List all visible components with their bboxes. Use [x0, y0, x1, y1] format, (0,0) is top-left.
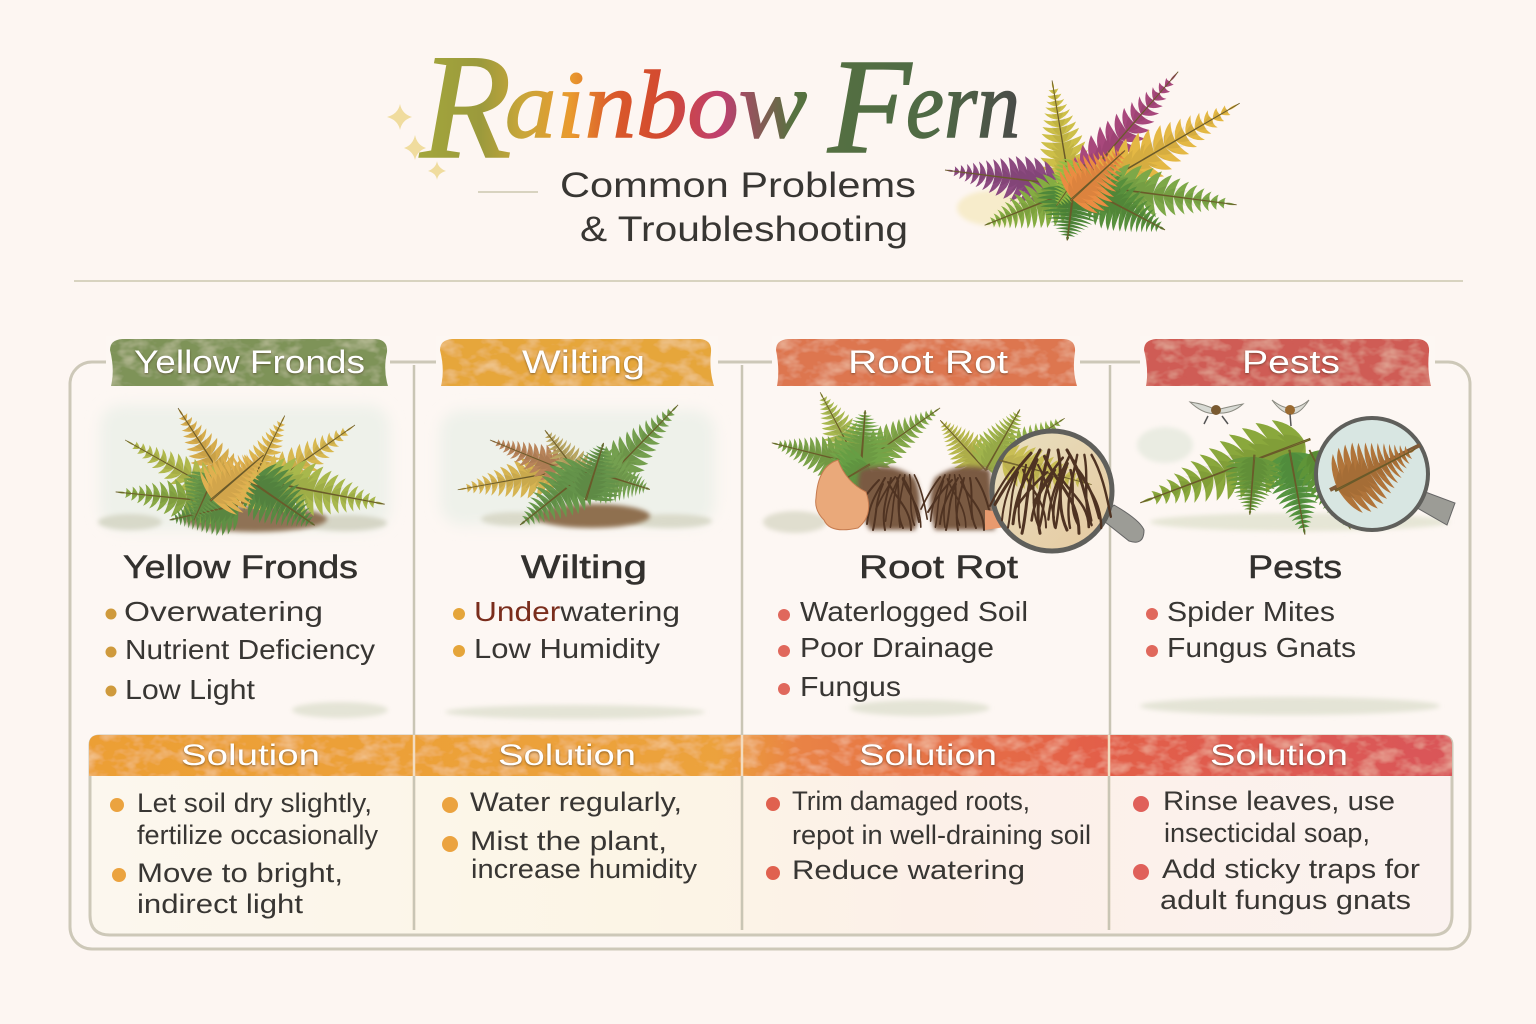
- solution: pests: [1133, 786, 1420, 915]
- heading: root rot: Root Rot: [859, 549, 1018, 585]
- list: causes: Poor Drainage: [800, 632, 994, 663]
- solution: wilting: Mist the plant,: [470, 826, 667, 856]
- list: causes: Spider Mites: [1167, 596, 1335, 627]
- icon: gnats: [1190, 400, 1309, 426]
- list: causes: Low Humidity: [474, 633, 660, 664]
- list: causes: Waterlogged Soil: [800, 596, 1028, 627]
- solution: root rot: repot in well-draining soil: [792, 820, 1091, 850]
- list: causes: Overwatering: [124, 596, 323, 627]
- solution: yellow fronds: fertilize occasionally: [137, 820, 378, 850]
- solution: wilting: increase humidity: [471, 854, 698, 884]
- list: causes: Nutrient Deficiency: [125, 634, 375, 665]
- list: causes: [778, 596, 1028, 702]
- subtitle: Common Problems: [560, 166, 916, 205]
- tab: yellow fronds: [106, 336, 390, 387]
- solution: root rot: Reduce watering: [792, 855, 1025, 885]
- panel: solutions: [89, 735, 1452, 935]
- solution: wilting: [442, 787, 698, 884]
- list: causes: Under watering: [474, 596, 680, 627]
- outer frame: [70, 362, 1470, 949]
- subtitle: [560, 166, 916, 249]
- title: F: [827, 32, 913, 182]
- illustration: pests fern with magnifier: [1128, 400, 1455, 540]
- solutions background: [90, 736, 1452, 935]
- list: causes: [1146, 596, 1356, 663]
- tab: pests: Pests: [1242, 344, 1340, 380]
- illustration: rainbow fern bouquet: [942, 56, 1253, 255]
- solution headings: Solution: [859, 739, 997, 772]
- list: causes: [453, 596, 680, 664]
- divider line: [74, 280, 1463, 282]
- subtitle: & Troubleshooting: [580, 210, 908, 249]
- solution: yellow fronds: indirect light: [137, 889, 304, 919]
- illustration: wilting fern: [440, 389, 715, 548]
- panel: wilting: [436, 336, 718, 664]
- solution: yellow fronds: Let soil dry slightly,: [137, 788, 372, 818]
- illustration: yellowing fern: [98, 395, 390, 551]
- solution: wilting: Water regularly,: [470, 787, 682, 817]
- panel: yellow fronds: [98, 336, 390, 705]
- illustration: root rot fern with magnifier: [763, 382, 1144, 551]
- tab: pests: [1140, 336, 1435, 387]
- title: ern: [906, 51, 1020, 158]
- heading: pests: Pests: [1248, 549, 1342, 585]
- solution: root rot: Trim damaged roots,: [792, 786, 1030, 816]
- list: causes: Low Light: [125, 674, 255, 705]
- solution headings: Solution: [181, 739, 320, 772]
- title: R: [419, 24, 512, 190]
- solution: pests: insecticidal soap,: [1164, 818, 1370, 848]
- tab: root rot: Root Rot: [848, 344, 1008, 380]
- panel: root rot: [763, 336, 1144, 702]
- solution: pests: Add sticky traps for: [1162, 854, 1420, 884]
- solutions header bar: [89, 735, 1452, 776]
- list: causes: Fungus: [800, 671, 901, 702]
- solution: root rot: [766, 786, 1091, 885]
- title: ainbow: [505, 51, 807, 158]
- solution headings: Solution: [1210, 739, 1348, 772]
- solution: pests: Rinse leaves, use: [1163, 786, 1395, 816]
- icon: sparkles: [387, 104, 446, 180]
- watercolor washes above solutions: [292, 697, 1440, 719]
- list: causes: [106, 596, 375, 705]
- tab: wilting: [436, 336, 718, 387]
- column dividers: [414, 365, 1110, 930]
- solution: yellow fronds: Move to bright,: [137, 858, 343, 888]
- panel: pests: [1128, 336, 1455, 663]
- tab: root rot: [772, 336, 1080, 387]
- list: causes: Fungus Gnats: [1167, 632, 1356, 663]
- heading: wilting: Wilting: [521, 549, 647, 585]
- solution: yellow fronds: [110, 788, 378, 919]
- tab: yellow fronds: Yellow Fronds: [134, 344, 365, 380]
- solution headings: [181, 739, 1348, 772]
- decorative dash by subtitle: [478, 191, 538, 193]
- solution: pests: adult fungus gnats: [1160, 885, 1411, 915]
- tab: wilting: Wilting: [522, 344, 645, 380]
- heading: yellow fronds: Yellow Fronds: [123, 549, 358, 585]
- solution headings: Solution: [498, 739, 636, 772]
